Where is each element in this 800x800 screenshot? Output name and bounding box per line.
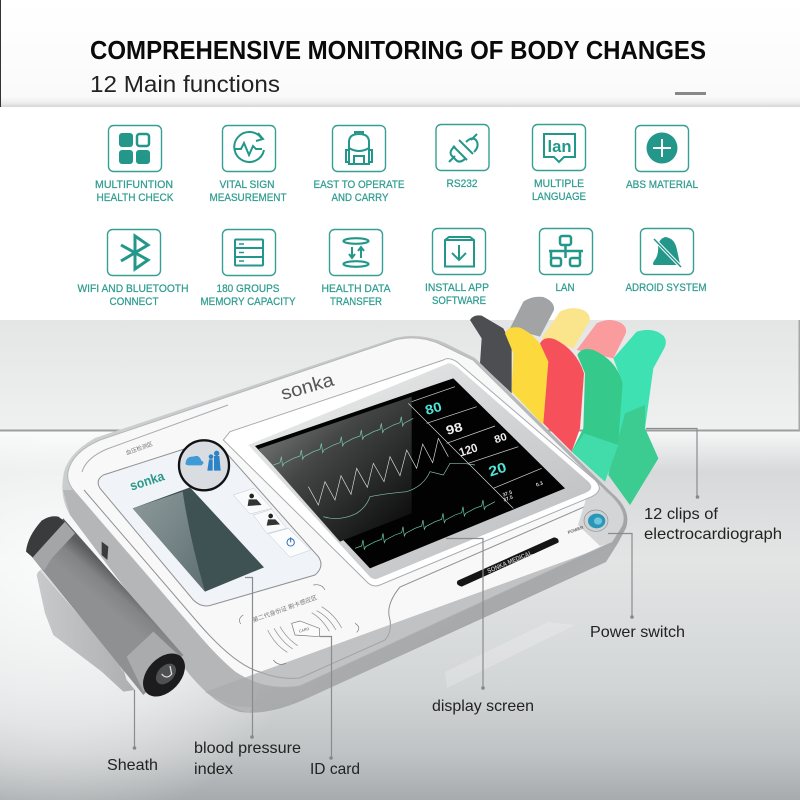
- feature: multiple language: LANGUAGE: [532, 191, 586, 203]
- vitals values: 120: [457, 440, 480, 460]
- clip: back grey: [503, 297, 554, 337]
- callout: display screen: display screen: [432, 698, 534, 715]
- panel: functions: [0, 107, 800, 320]
- brand logo: sonka: [279, 370, 337, 405]
- callout: clips: [644, 428, 782, 543]
- callout: power switch: [590, 534, 685, 641]
- light sleeve: [32, 520, 75, 571]
- clip: green: [572, 349, 623, 482]
- clip: red: [540, 338, 584, 452]
- clip: back teal: [608, 330, 666, 505]
- feature: memory capacity: 180 GROUPS: [216, 283, 280, 295]
- pleth trace: [308, 438, 448, 505]
- clip: back pale yellow: [542, 308, 590, 348]
- vitals values: 37.5: [502, 490, 513, 499]
- reader caption: 第二代身份证 刷卡感应区: [251, 593, 318, 624]
- header band: [0, 0, 800, 107]
- feature: ABS material: [626, 126, 698, 191]
- mount plate: [37, 568, 135, 692]
- left silver flank: [63, 490, 262, 713]
- feature: LAN: [540, 228, 592, 294]
- panel outline: [98, 444, 321, 606]
- callout: ID card: ID card: [310, 761, 360, 778]
- feature: memory capacity: [200, 230, 296, 308]
- feature: install app software: INSTALL APP: [425, 282, 489, 294]
- feature: health data transfer: TRANSFER: [330, 296, 382, 308]
- silver base: [62, 336, 627, 713]
- feature: wifi and bluetooth: [78, 230, 189, 308]
- feature: LAN: LAN: [556, 282, 575, 294]
- top cap: [26, 516, 65, 557]
- cylinder: [32, 518, 183, 695]
- blood pressure cuff: [26, 516, 193, 705]
- collar: [127, 632, 178, 692]
- feature: vital sign measurement: MEASUREMENT: [210, 192, 287, 204]
- screen panel: [255, 378, 565, 568]
- display screen: [223, 359, 599, 586]
- callout: clips: 12 clips of: [644, 506, 719, 523]
- feature: multiple language: [532, 124, 586, 203]
- accent bar: [675, 92, 706, 95]
- callout: power switch: Power switch: [590, 624, 685, 641]
- feature: multifunction health check: MULTIFUNTION: [95, 179, 173, 191]
- power corner: [578, 480, 624, 546]
- electrocardiograph clips: [470, 297, 666, 505]
- feature: vital sign measurement: [210, 126, 287, 204]
- clip: yellow: [505, 327, 548, 423]
- clip: teal lower shade: [608, 405, 658, 505]
- mount clip: [102, 542, 108, 560]
- feature: vital sign measurement: VITAL SIGN: [220, 179, 275, 191]
- feature: multifunction health check: HEALTH CHECK: [96, 192, 174, 204]
- LCD display: [133, 487, 264, 592]
- feature: wifi and bluetooth: CONNECT: [110, 296, 159, 308]
- feature: android system: [626, 228, 706, 294]
- feature: install app software: [425, 228, 489, 307]
- white top surface: [68, 338, 624, 687]
- feature: easy to operate and carry: EAST TO OPERATE: [314, 179, 404, 191]
- button: power: [268, 528, 311, 557]
- feature: wifi and bluetooth: WIFI AND BLUETOOTH: [78, 283, 189, 295]
- title: COMPREHENSIVE MONITORING OF BODY CHANGES: [90, 35, 706, 65]
- callout: display screen: [432, 538, 534, 715]
- callout: blood pressure index: blood pressure: [194, 740, 301, 757]
- feature: multiple language: MULTIPLE: [534, 178, 584, 190]
- vitals values: 20: [486, 459, 509, 480]
- button: user one: [233, 488, 272, 514]
- ID card slot: SONKA MEDICAL: [486, 550, 534, 575]
- callout: sheath: Sheath: [107, 757, 158, 774]
- power button: [567, 510, 608, 535]
- callout: blood pressure index: index: [194, 761, 233, 778]
- vitals values: 98: [444, 420, 464, 438]
- subtitle: 12 Main functions: [90, 71, 280, 97]
- card reader area: CARD: [299, 627, 310, 634]
- feature: RS232: [436, 124, 489, 190]
- ID card slot: [457, 537, 559, 587]
- callout: clips: electrocardiograph: [644, 526, 782, 543]
- ECG top trace: [273, 417, 413, 466]
- device body: [62, 336, 627, 713]
- feature: easy to operate and carry: [314, 126, 404, 204]
- ECG bottom trace: [355, 500, 495, 549]
- feature: health data transfer: [322, 230, 391, 308]
- clip: dark: [470, 315, 512, 393]
- brand logo: sonka: [128, 468, 167, 494]
- feature: ABS material: ABS MATERIAL: [626, 179, 698, 191]
- vitals values: [423, 399, 544, 504]
- vitals values: 80: [423, 399, 444, 418]
- feature: install app software: SOFTWARE: [432, 295, 486, 307]
- button: user two: [253, 509, 287, 533]
- vitals values: 80: [493, 431, 509, 446]
- vitals values: 0.3: [535, 480, 544, 489]
- vitals panel dividers: [408, 387, 542, 508]
- power button: POWER: [567, 524, 585, 535]
- capnography trace: [323, 463, 475, 519]
- clip: back pink: [577, 320, 626, 358]
- surface grooves: [82, 405, 228, 472]
- card waves: [268, 607, 342, 652]
- cloud badge: [179, 440, 229, 490]
- bezel: [223, 359, 599, 586]
- feature: memory capacity: MEMORY CAPACITY: [200, 296, 296, 308]
- feature: multifunction health check: [95, 126, 174, 204]
- card icon: [292, 621, 319, 637]
- feature: RS232: RS232: [446, 178, 478, 190]
- feature: health data transfer: HEALTH DATA: [322, 283, 391, 295]
- callout: sheath: [107, 690, 158, 774]
- feature: multiple language: lan: [548, 137, 572, 156]
- background: [0, 320, 800, 800]
- vitals values: 37.5: [503, 495, 514, 504]
- callout: ID card: [310, 636, 360, 778]
- glare: [258, 397, 412, 542]
- card reader area: [239, 585, 359, 664]
- feature: easy to operate and carry: AND CARRY: [332, 192, 389, 204]
- feature: android system: ADROID SYSTEM: [626, 282, 706, 294]
- cuff end: [135, 645, 193, 705]
- callout: blood pressure index: [194, 578, 301, 778]
- blood pressure panel: [98, 440, 321, 606]
- zone caption: 血压检测区: [125, 440, 154, 457]
